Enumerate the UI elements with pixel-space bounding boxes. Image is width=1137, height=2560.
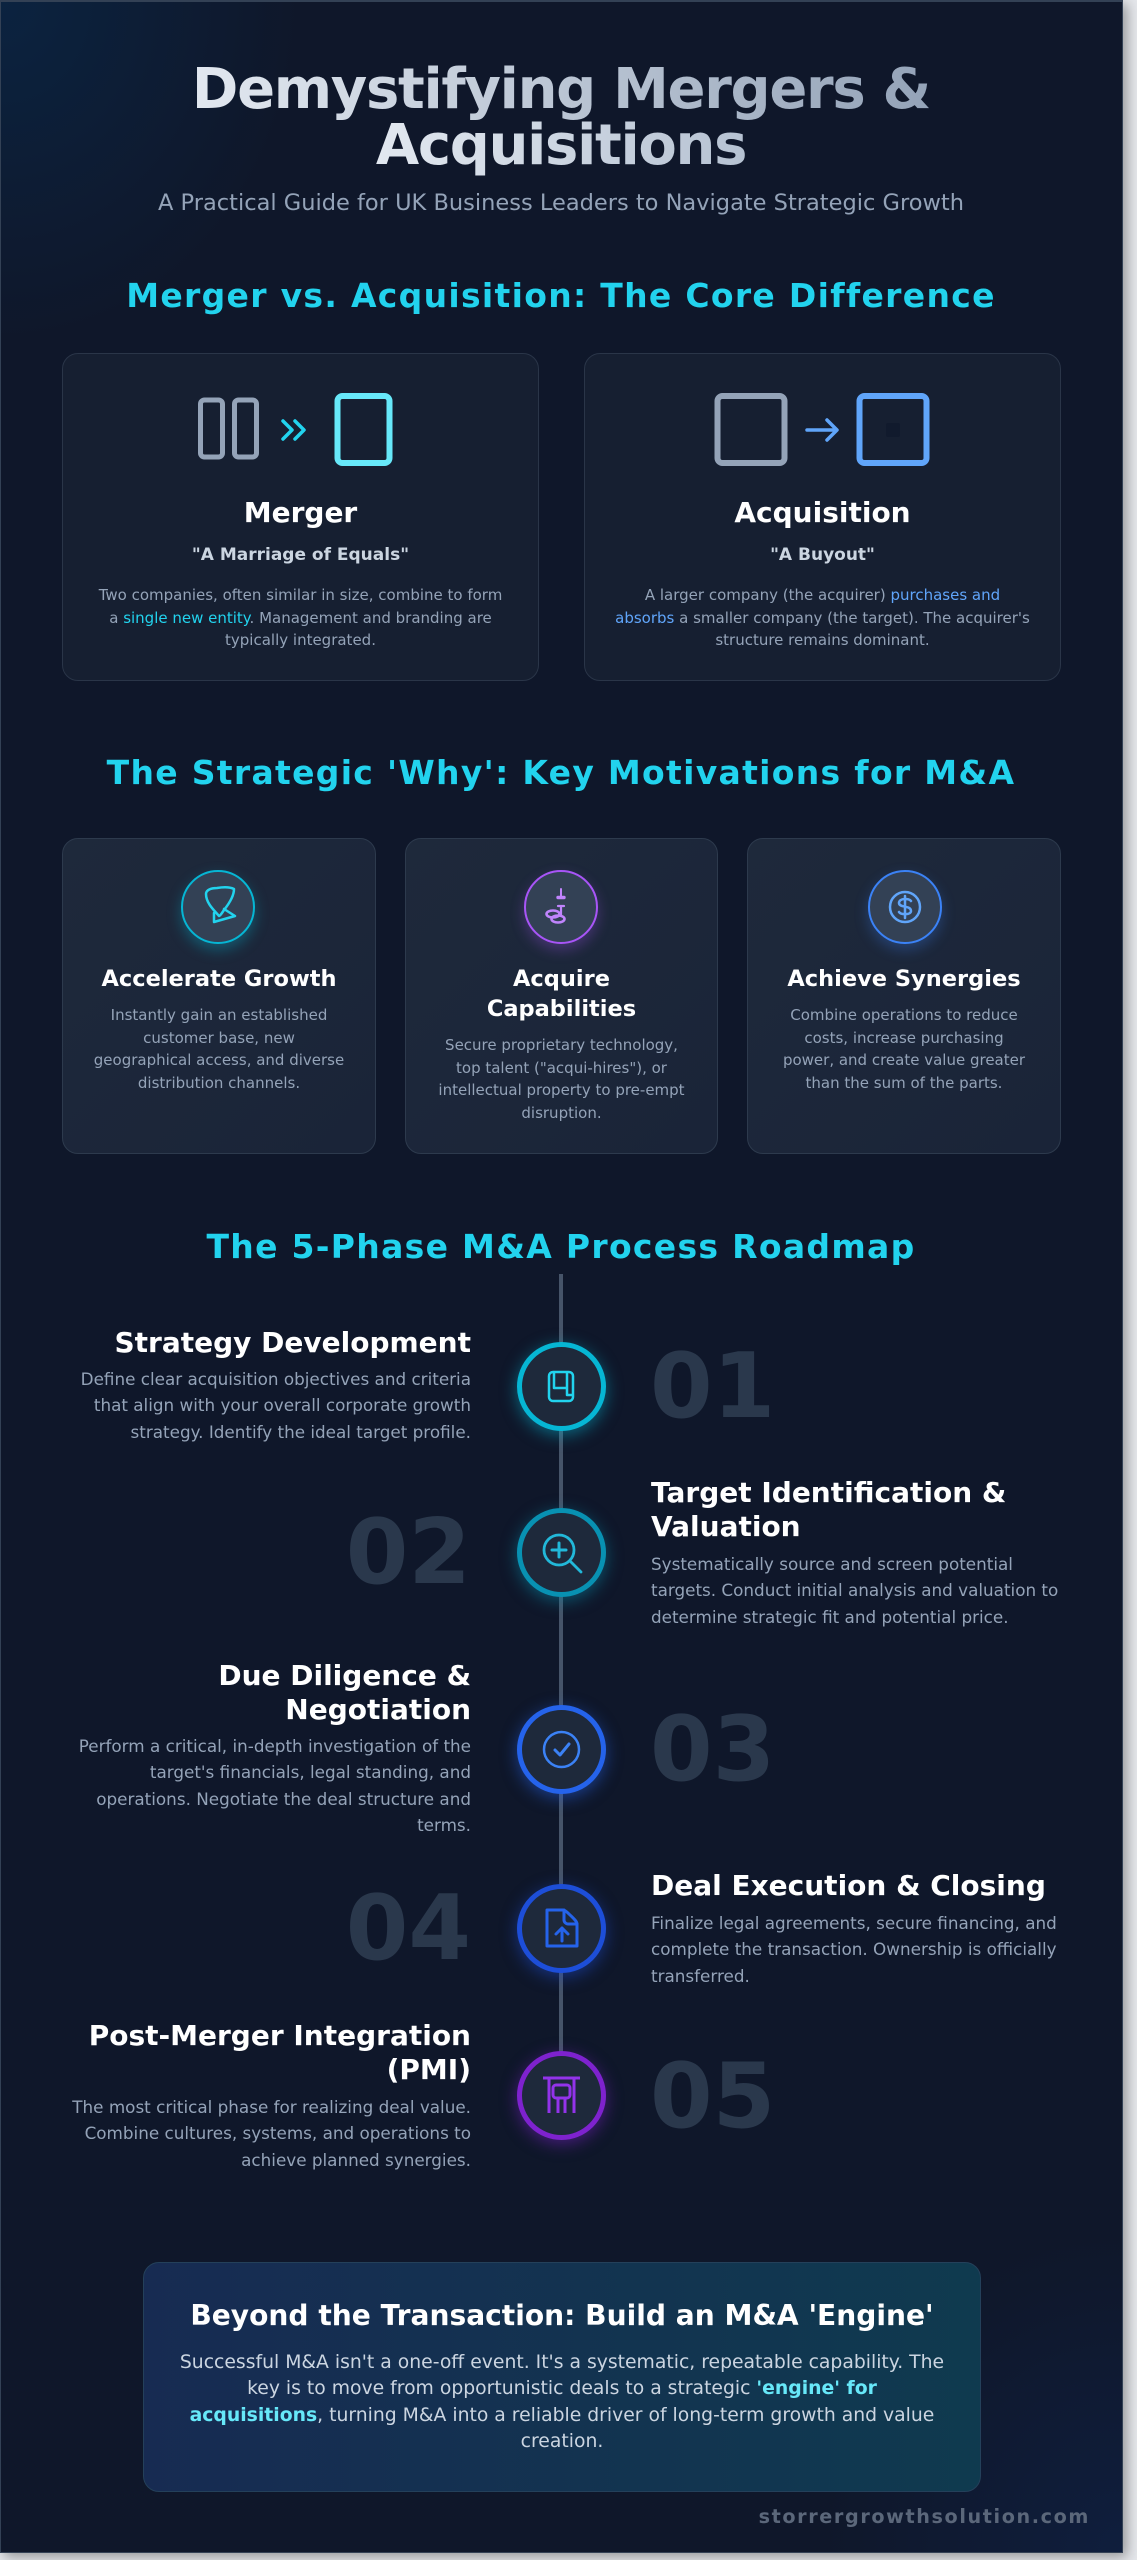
- timeline line: [559, 1274, 563, 2064]
- phase 1 title: Strategy Development: [114, 1326, 471, 1359]
- phase 5 node and icon: [517, 2050, 606, 2140]
- phase 5 title: (PMI): [387, 2053, 471, 2086]
- merger description: [98, 586, 502, 649]
- phase 4 number: 04: [346, 1876, 471, 1981]
- panel: acquisition: [584, 353, 1061, 681]
- acquisition quote: "A Buyout": [770, 545, 875, 565]
- phase 2 title: Valuation: [651, 1510, 801, 1543]
- achieve synergies description: Combine operations to reduce: [790, 1006, 1018, 1024]
- phase 1 number: 01: [650, 1334, 775, 1439]
- phase 5 description: [72, 2097, 471, 2170]
- phase 2 number: 02: [346, 1500, 471, 1605]
- merger quote: "A Marriage of Equals": [192, 545, 409, 565]
- phase 3: due diligence: [79, 1659, 775, 1835]
- phase 3 title: Negotiation: [285, 1693, 471, 1726]
- callout text: creation.: [521, 2431, 603, 2452]
- icon: two companies merging into one: [198, 393, 392, 466]
- phase 5 number: 05: [650, 2044, 775, 2149]
- accelerate growth description: distribution channels.: [138, 1074, 300, 1092]
- achieve synergies description: than the sum of the parts.: [806, 1074, 1002, 1092]
- heading: merger vs acquisition: Merger vs. Acquisition: The Core Difference: [126, 276, 996, 315]
- phase 1: strategy development: [81, 1326, 775, 1444]
- achieve synergies description: costs, increase purchasing: [804, 1028, 1004, 1046]
- phase 3 description: target's financials, legal standing, and: [150, 1762, 471, 1782]
- phase 4 title: Deal Execution & Closing: [651, 1869, 1046, 1902]
- acquire capabilities description: Secure proprietary technology,: [445, 1036, 678, 1054]
- callout text: [180, 2352, 944, 2452]
- phase 3 number: 03: [650, 1697, 775, 1802]
- merger title: Merger: [244, 496, 357, 529]
- phase 4: deal execution: [346, 1869, 1057, 1986]
- title: [192, 57, 930, 178]
- phase 3 node and icon: [517, 1704, 606, 1794]
- accelerate growth description: Instantly gain an established: [111, 1006, 327, 1024]
- panel: merger: [62, 353, 539, 681]
- merger description: typically integrated.: [225, 631, 376, 649]
- phase 3 title: [218, 1659, 471, 1726]
- acquisition description: [615, 586, 1030, 649]
- phase 2 title: Target Identification &: [651, 1476, 1006, 1509]
- phase 5: post-merger integration: [72, 2019, 775, 2170]
- callout text: key is to move from opportunistic deals to a strategic 'engine' for: [247, 2378, 877, 2399]
- phase 4 node and icon: [517, 1884, 606, 1972]
- accelerate growth description: [94, 1006, 344, 1092]
- heading: motivations: The Strategic 'Why': Key Motivations for M&A: [107, 753, 1015, 792]
- phase 2 description: determine strategic fit and potential price.: [651, 1607, 1009, 1627]
- phase 5 description: The most critical phase for realizing deal value.: [72, 2097, 471, 2117]
- merger description: a single new entity. Management and branding are: [109, 608, 492, 626]
- merger description: Two companies, often similar in size, combine to form: [99, 586, 502, 604]
- icon: growth: [180, 870, 254, 944]
- title: Demystifying Mergers &: [192, 57, 930, 122]
- icon: capabilities: [524, 870, 598, 944]
- achieve synergies description: [783, 1006, 1026, 1092]
- acquire capabilities description: disruption.: [521, 1104, 602, 1122]
- phase 5 description: achieve planned synergies.: [241, 2150, 471, 2170]
- phase 3 description: terms.: [417, 1815, 471, 1835]
- phase 1 description: that align with your overall corporate growth: [94, 1395, 471, 1415]
- accelerate growth title: Accelerate Growth: [101, 966, 337, 992]
- phase 1 description: strategy. Identify the ideal target profile.: [131, 1422, 471, 1442]
- title: Acquisitions: [376, 113, 746, 178]
- phase 2: target identification: [346, 1476, 1058, 1627]
- phase 1 description: [81, 1369, 471, 1442]
- phase 2 description: [651, 1554, 1058, 1627]
- footer website: storrergrowthsolution.com: [759, 2505, 1090, 2528]
- phase 2 title: [651, 1476, 1006, 1543]
- achieve synergies title: Achieve Synergies: [787, 966, 1021, 992]
- acquire capabilities description: top talent ("acqui-hires"), or: [456, 1058, 667, 1076]
- acquisition title: Acquisition: [734, 496, 911, 529]
- icon: larger company absorbs smaller: [714, 393, 930, 466]
- phase 4 description: [651, 1913, 1057, 1986]
- phase 5 title: Post-Merger Integration: [89, 2019, 471, 2052]
- phase 5 title: [89, 2019, 471, 2086]
- phase 3 title: Due Diligence &: [218, 1659, 471, 1692]
- phase 1 description: Define clear acquisition objectives and criteria: [81, 1369, 471, 1389]
- acquire capabilities title: [487, 966, 636, 1022]
- phase 3 description: operations. Negotiate the deal structure and: [96, 1789, 471, 1809]
- acquisition description: A larger company (the acquirer) purchases and: [645, 586, 1000, 604]
- subtitle: A Practical Guide for UK Business Leaders to Navigate Strategic Growth: [158, 190, 964, 216]
- acquire capabilities title: Acquire: [513, 966, 610, 992]
- icon: dollar coin: [868, 870, 942, 944]
- panel: achieve synergies: [747, 838, 1061, 1154]
- callout title: Beyond the Transaction: Build an M&A 'Engine': [190, 2299, 934, 2332]
- acquire capabilities description: [438, 1036, 685, 1122]
- phase 2 node and icon: [517, 1508, 606, 1596]
- callout text: Successful M&A isn't a one-off event. It's a systematic, repeatable capability. The: [180, 2352, 944, 2373]
- phase 2 description: targets. Conduct initial analysis and valuation to: [651, 1580, 1058, 1600]
- callout: M&A engine: [143, 2262, 981, 2492]
- acquire capabilities title: Capabilities: [487, 996, 636, 1022]
- phase 2 description: Systematically source and screen potential: [651, 1554, 1013, 1574]
- phase 1 node and icon: [517, 1342, 606, 1430]
- phase 4 description: Finalize legal agreements, secure financing, and: [651, 1913, 1057, 1933]
- acquisition description: absorbs a smaller company (the target). The acquirer's: [615, 608, 1030, 626]
- phase 3 description: [79, 1736, 471, 1835]
- accelerate growth description: customer base, new: [143, 1028, 295, 1046]
- callout text: acquisitions, turning M&A into a reliable driver of long-term growth and value: [190, 2405, 934, 2426]
- acquisition description: structure remains dominant.: [715, 631, 930, 649]
- heading: roadmap: The 5-Phase M&A Process Roadmap: [206, 1227, 916, 1266]
- phase 5 description: Combine cultures, systems, and operations to: [85, 2123, 471, 2143]
- phase 3 description: Perform a critical, in-depth investigation of the: [79, 1736, 471, 1756]
- panel: accelerate growth: [62, 838, 376, 1154]
- accelerate growth description: geographical access, and diverse: [94, 1051, 344, 1069]
- acquire capabilities description: intellectual property to pre-empt: [438, 1081, 685, 1099]
- phase 4 description: complete the transaction. Ownership is officially: [651, 1939, 1057, 1959]
- phase 4 description: transferred.: [651, 1966, 750, 1986]
- panel: acquire capabilities: [405, 838, 718, 1154]
- achieve synergies description: power, and create value greater: [783, 1051, 1025, 1069]
